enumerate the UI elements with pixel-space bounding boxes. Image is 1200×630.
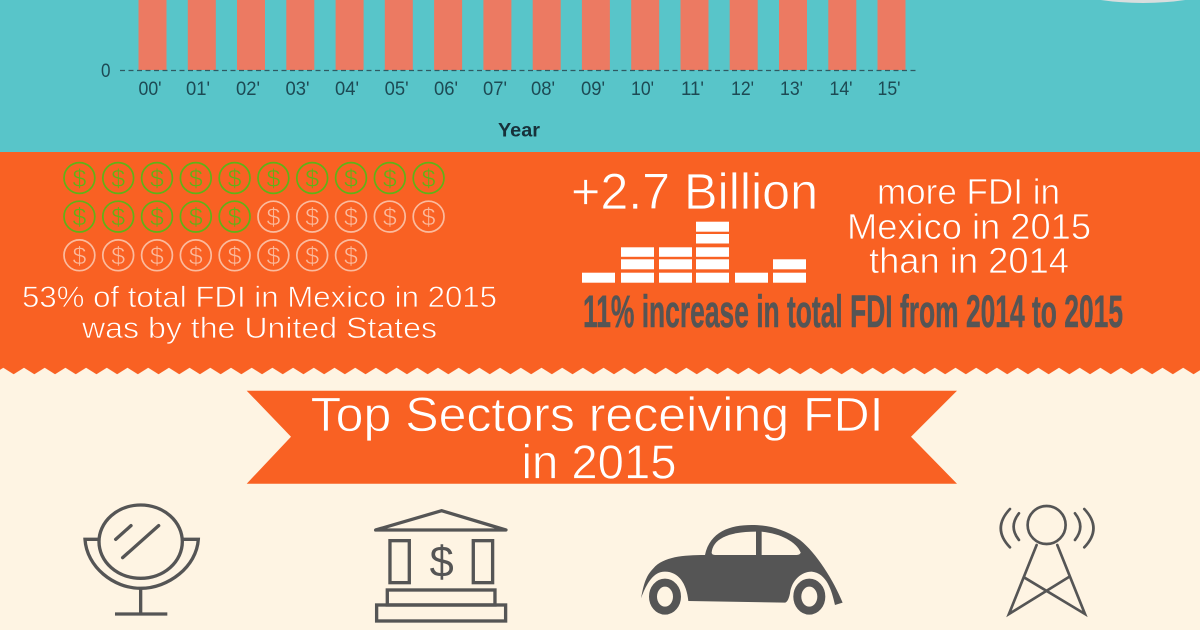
text: 53 percent of total FDI: 53% of total FDI in Mexico in 2015 [22,281,497,314]
green coins: United States share: $ [150,204,164,232]
icon: mirror [85,505,198,614]
green coins: United States share: $ [111,204,125,232]
green coins: United States share: $ [266,165,280,193]
green coins: United States share: $ [72,204,86,232]
x axis year labels: 02' [236,79,260,100]
x axis year labels: 11' [681,79,704,100]
x axis year labels: 08' [531,79,555,100]
icon: bank [376,511,506,621]
pale coins: remaining share [64,201,444,271]
x axis year labels: 09' [581,79,605,100]
x axis year labels: 05' [385,79,409,100]
x axis year labels: 15' [878,79,900,100]
pale coins: remaining share: $ [189,242,203,270]
pale coins: remaining share: $ [72,242,86,270]
text: 53 percent of total FDI [22,281,497,345]
banner: top sectors heading: in 2015 [522,437,676,490]
green coins: United States share: $ [344,165,358,193]
pale coins: remaining share: $ [344,242,358,270]
x axis year labels: 12' [731,79,754,100]
x axis year labels: 00' [138,79,162,100]
green coins: United States share: $ [422,165,436,193]
x axis year labels: 07' [483,79,507,100]
y axis zero label: 0 [101,61,110,82]
pale coins: remaining share: $ [228,242,242,270]
x axis year labels: 14' [830,79,852,100]
icon: white segmented bars [582,222,806,283]
x axis year labels [138,79,900,100]
bars [138,0,906,70]
text: 53 percent of total FDI: was by the United States [81,312,437,345]
green coins: United States share: $ [150,165,164,193]
panel: orange stats band [0,152,1200,375]
green coins: United States share: $ [383,165,397,193]
bar chart: FDI by year [101,0,918,142]
text: more FDI in Mexico [847,171,1091,281]
green coins: United States share: $ [111,165,125,193]
icon: car [641,525,843,611]
heading: plus 2.7 billion: +2.7 Billion [571,163,818,220]
icon: bank: $ [430,539,454,587]
green coins: United States share: $ [228,204,242,232]
text: more FDI in Mexico: Mexico in 2015 [847,206,1091,247]
x axis year labels: 06' [434,79,458,100]
banner: top sectors heading: Top Sectors receiving FDI [311,389,884,442]
x axis year labels: 04' [335,79,359,100]
text: more FDI in Mexico: than in 2014 [869,240,1069,281]
x axis year labels: 13' [780,79,803,100]
pale coins: remaining share: $ [111,242,125,270]
pale coins: remaining share: $ [383,204,397,232]
pale coins: remaining share: $ [422,204,436,232]
green coins: United States share: $ [189,204,203,232]
x axis year labels: 10' [631,79,654,100]
green coins: United States share: $ [189,165,203,193]
green coins: United States share: $ [305,165,319,193]
icon: radio tower [1001,506,1093,614]
text: more FDI in Mexico: more FDI in [877,171,1060,212]
pale coins: remaining share: $ [150,242,164,270]
x axis year labels: 01' [186,79,210,100]
icon array: dollar coins, 53 percent share [64,163,444,271]
pale coins: remaining share: $ [344,204,358,232]
banner: top sectors heading [247,389,957,490]
green coins: United States share: $ [228,165,242,193]
green coins: United States share [64,163,444,232]
pale coins: remaining share: $ [305,242,319,270]
pale coins: remaining share: $ [305,204,319,232]
x axis year labels: 03' [286,79,310,100]
green coins: United States share: $ [72,165,86,193]
pale coins: remaining share: $ [266,204,280,232]
x axis title: Year [498,120,541,142]
pale coins: remaining share: $ [266,242,280,270]
decorative ellipse at top right [1028,0,1200,3]
panel: teal chart background [0,0,1200,152]
